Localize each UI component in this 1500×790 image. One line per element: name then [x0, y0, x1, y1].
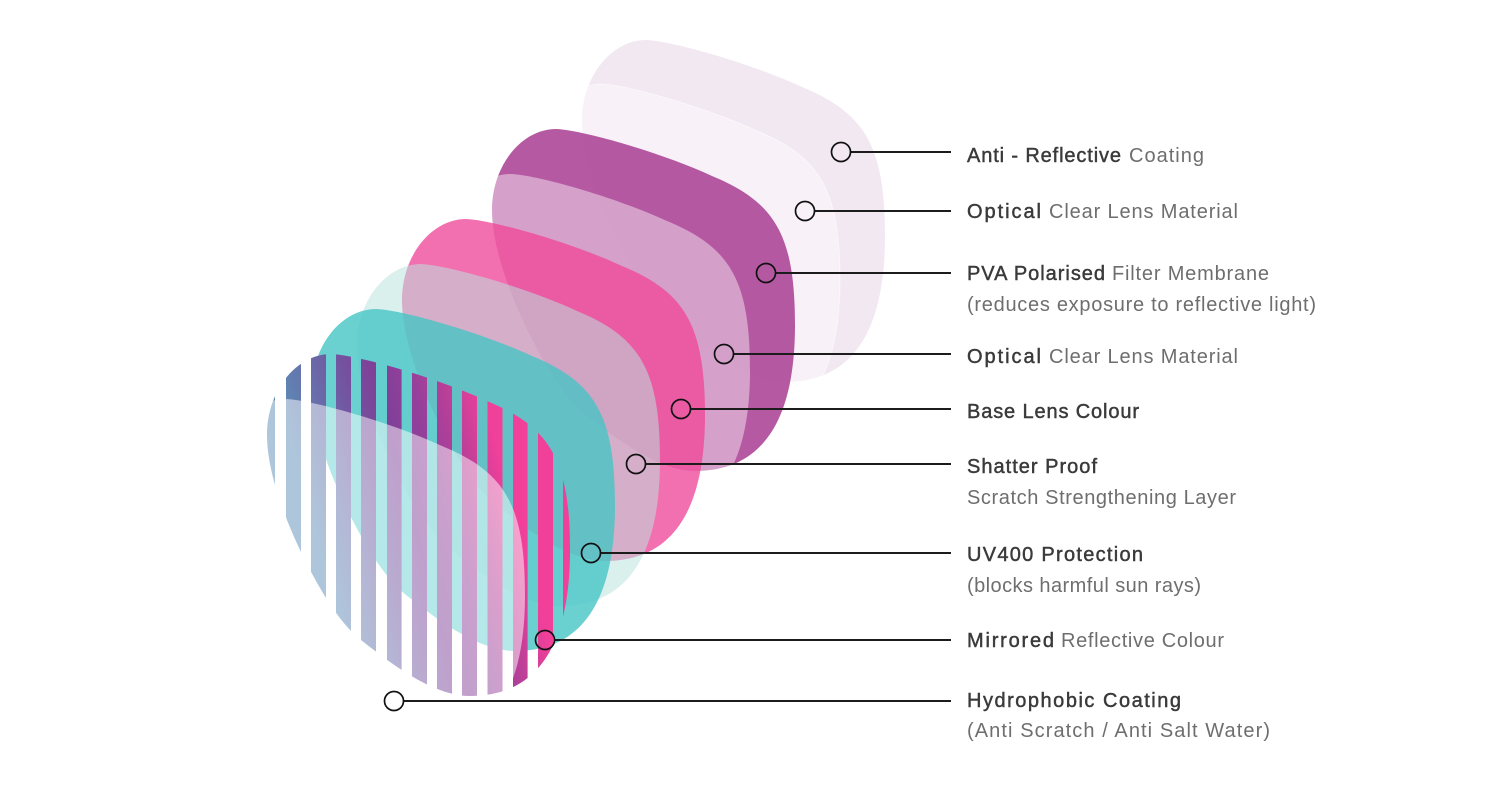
callout: Optical Clear Lens Material (rear): [796, 201, 1238, 223]
layer: UV400 protection: [312, 309, 615, 651]
callout: Anti-Reflective Coating: Coating: [1129, 145, 1204, 167]
callout: Anti-Reflective Coating: Anti - Reflective: [967, 145, 1121, 167]
callout: Anti-Reflective Coating: [832, 142, 1204, 167]
layer: mirrored reflective stripes: [267, 354, 570, 696]
callout: Optical Clear Lens Material (front): Optical: [967, 346, 1041, 368]
callout: Base Lens Colour: [672, 400, 1139, 423]
lens stack: [267, 40, 885, 696]
callout: Mirrored Reflective Colour: Reflective Colour: [1061, 630, 1224, 652]
callout: UV400 Protection: [582, 544, 1201, 597]
layer: anti-reflective coating: [582, 40, 885, 382]
callout: Base Lens Colour: Base Lens Colour: [967, 401, 1139, 423]
callout: UV400 Protection: (blocks harmful sun rays): [967, 575, 1201, 597]
callout: Optical Clear Lens Material (front): Clear Lens Material: [1049, 346, 1238, 368]
callout: Hydrophobic Coating: (Anti Scratch / Anti Salt Water): [967, 720, 1270, 742]
callout: Shatter Proof: Scratch Strengthening Layer: [967, 487, 1236, 509]
layer: optical clear lens front: [447, 174, 750, 516]
callout: PVA Polarised Filter Membrane: [756, 263, 1316, 316]
callout: Hydrophobic Coating: Hydrophobic Coating: [967, 690, 1181, 712]
layer: base lens colour: [402, 219, 705, 561]
callout: Optical Clear Lens Material (front): [714, 344, 1238, 368]
callout: Optical Clear Lens Material (rear): Optical: [967, 201, 1041, 223]
callout: UV400 Protection: UV400 Protection: [967, 544, 1143, 566]
callout: Hydrophobic Coating: [384, 690, 1270, 742]
layer: hydrophobic coating: [222, 399, 525, 741]
layer: PVA polarised filter: [492, 129, 795, 471]
callout: Shatter Proof: Shatter Proof: [967, 456, 1097, 478]
layer: optical clear lens rear: [537, 84, 840, 426]
callout: Shatter Proof: [626, 454, 1236, 509]
callout: Mirrored Reflective Colour: Mirrored: [967, 630, 1054, 652]
callout: PVA Polarised Filter Membrane: PVA Polarised: [967, 263, 1105, 285]
callout: PVA Polarised Filter Membrane: (reduces exposure to reflective light): [967, 294, 1316, 316]
callout: Optical Clear Lens Material (rear): Clear Lens Material: [1049, 201, 1238, 223]
layer: shatter proof: [357, 264, 660, 606]
callout: PVA Polarised Filter Membrane: Filter Membrane: [1112, 263, 1269, 285]
callout: Mirrored Reflective Colour: [536, 630, 1224, 652]
